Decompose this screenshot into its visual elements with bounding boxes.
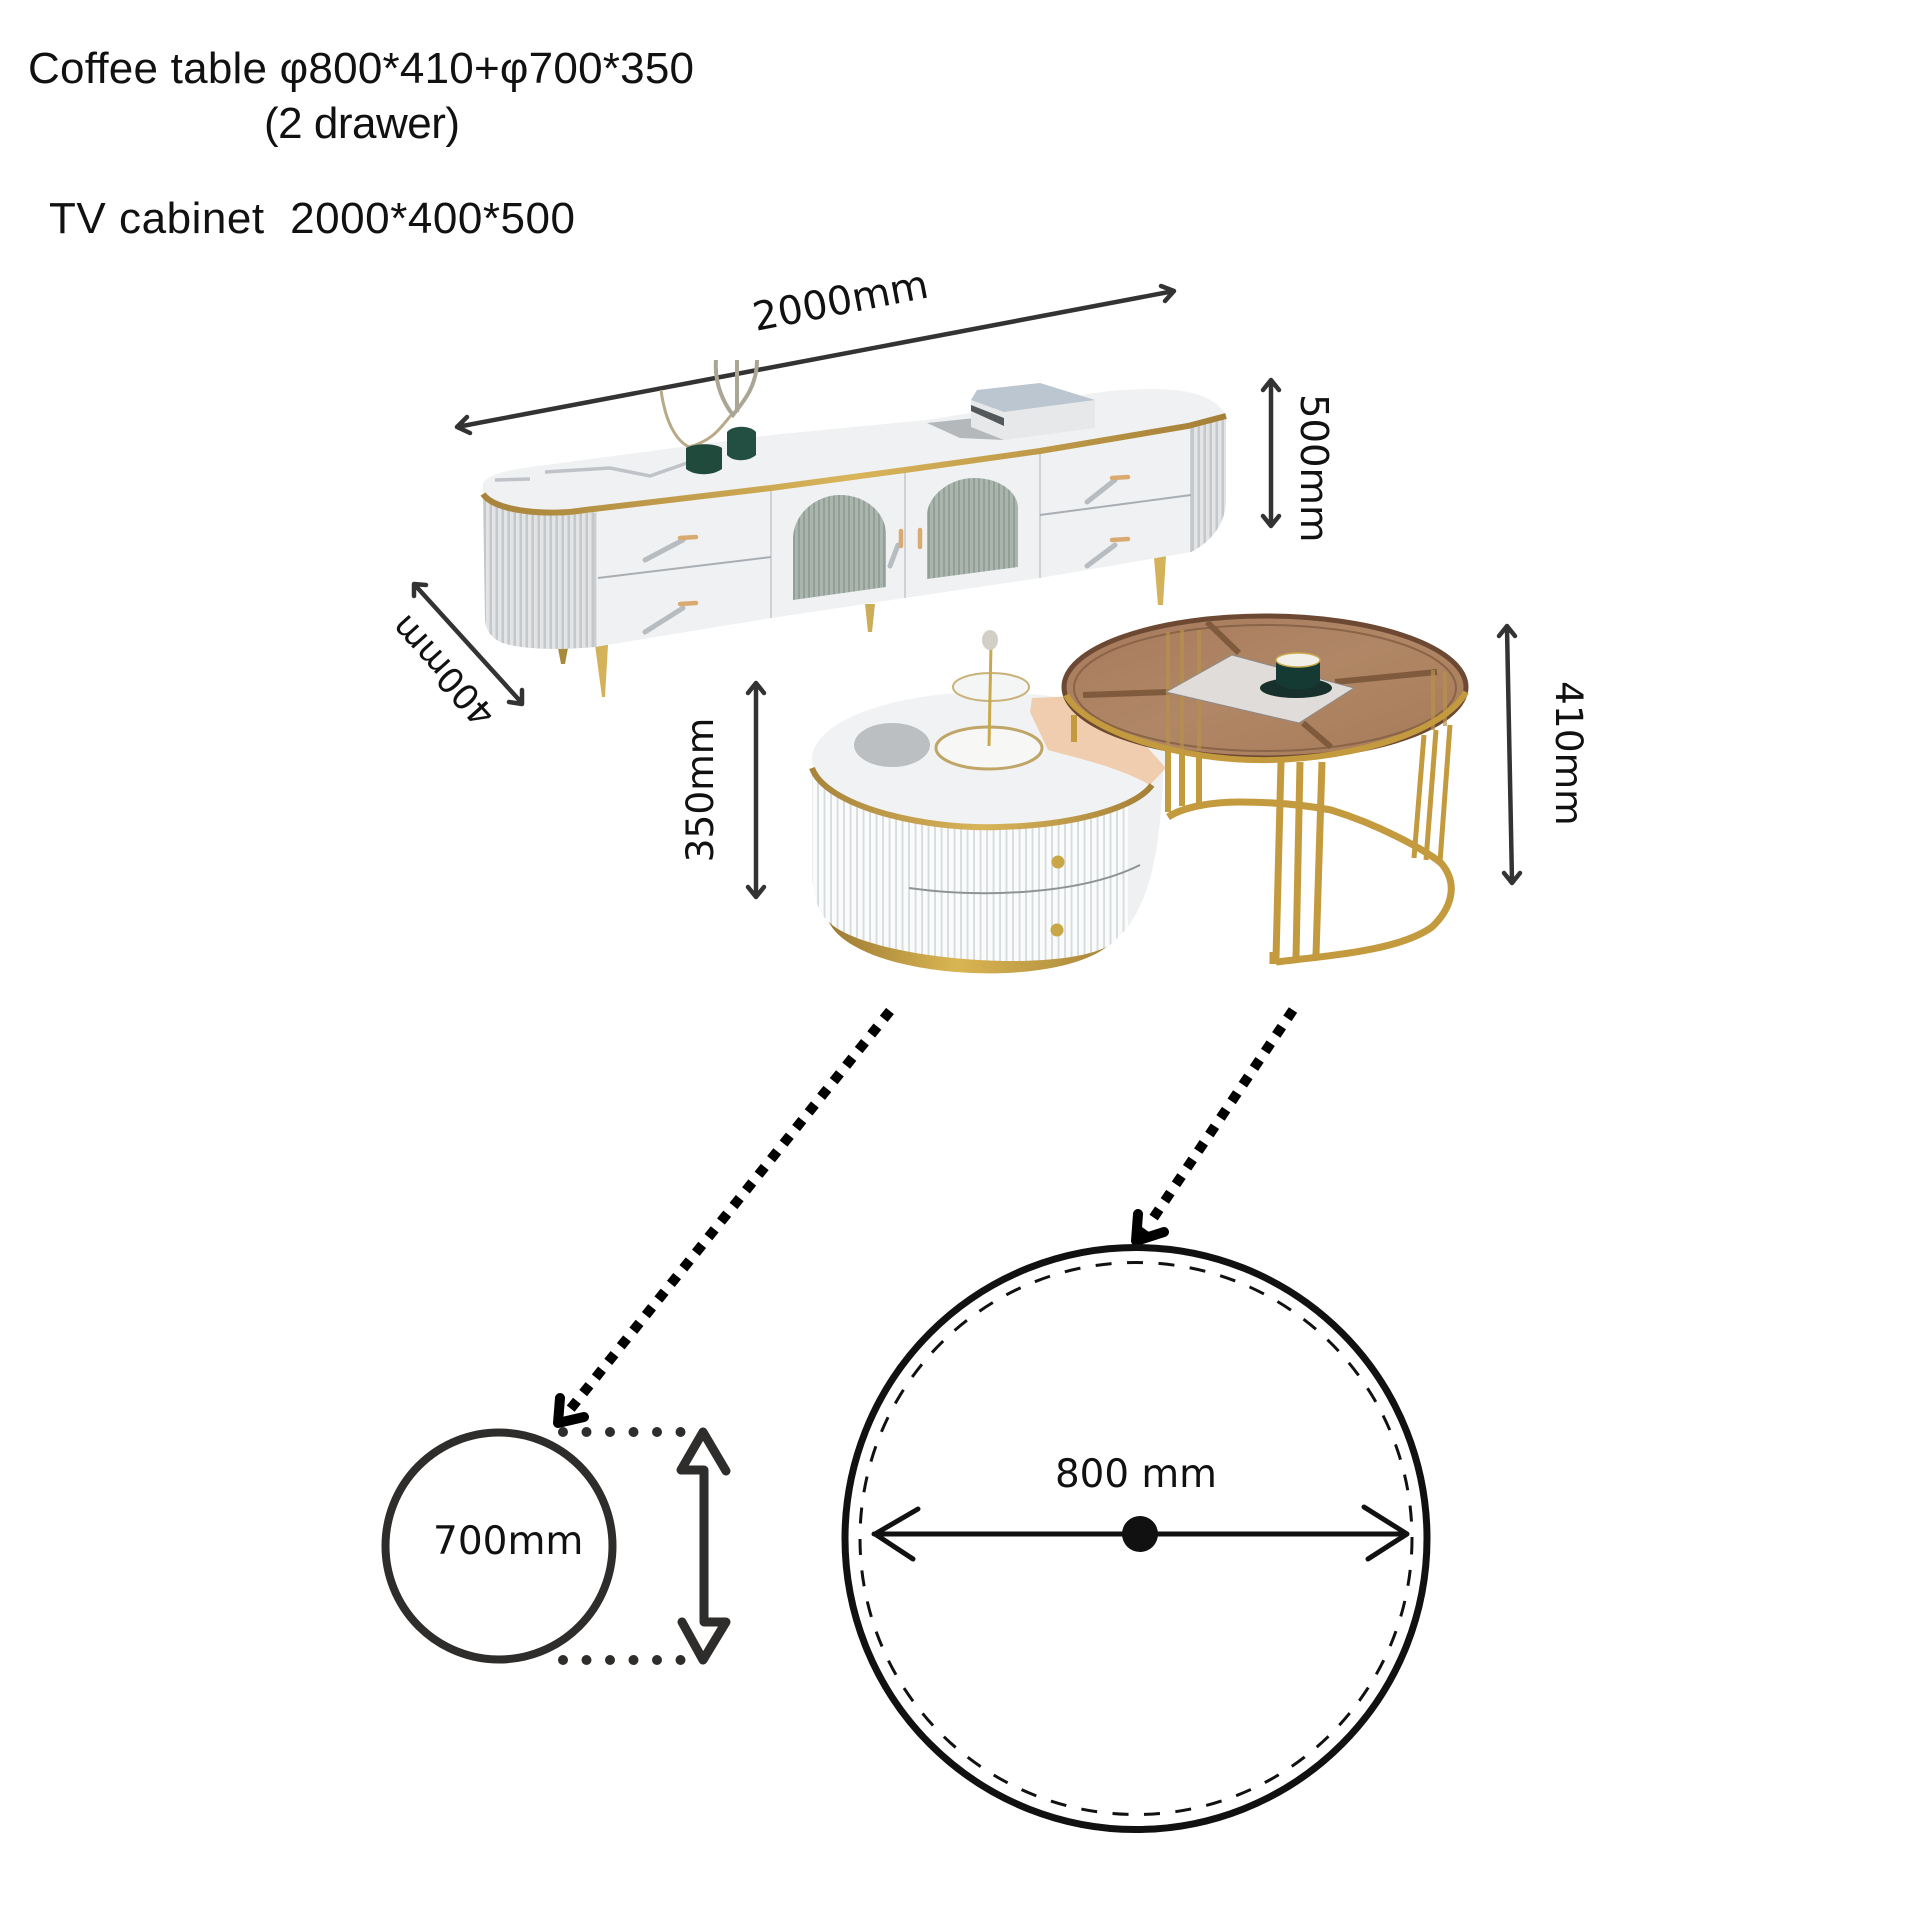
arrow: 350mm <box>748 683 764 897</box>
dotted guides <box>563 1432 682 1660</box>
dimension: cabinet height <box>1263 380 1336 542</box>
magazine <box>1166 655 1354 723</box>
dimension: cabinet depth <box>384 584 522 734</box>
dimension: cabinet width <box>457 262 1174 433</box>
label: 410mm: 410mm <box>1547 681 1591 826</box>
glass door: right <box>927 478 1018 579</box>
marble veins <box>495 462 690 480</box>
circle outline <box>845 1248 1427 1830</box>
label: 700mm: 700mm <box>433 1519 583 1564</box>
cabinet body <box>483 418 1226 649</box>
plate shadow <box>854 723 930 767</box>
dimension: drum height <box>678 683 764 897</box>
amber reflection <box>1030 695 1166 785</box>
center point <box>1122 1516 1158 1552</box>
dotted arrow: glass table to large circle <box>1136 1010 1293 1241</box>
label: 400mm: 400mm <box>384 607 504 734</box>
diagram: 800mm circle <box>845 1248 1427 1830</box>
label: 800 mm: 800 mm <box>1055 1452 1217 1497</box>
drawer knobs <box>1050 856 1064 936</box>
diameter arrow <box>874 1507 1407 1559</box>
label: 350mm: 350mm <box>678 718 722 862</box>
books <box>927 383 1095 440</box>
arrow: 2000mm <box>457 286 1174 433</box>
photo: glass top table <box>1064 616 1466 964</box>
gold frame <box>1074 715 1451 964</box>
text: tv cabinet size: TV cabinet 2000*400*500 <box>49 194 575 243</box>
marble table top <box>812 692 1166 826</box>
gold rim <box>483 416 1226 513</box>
marble top <box>483 389 1226 515</box>
fluted ends <box>480 410 1228 660</box>
handles and shadows <box>645 477 1128 632</box>
diagram: 700mm circle <box>386 1432 726 1660</box>
drawer seam <box>909 865 1140 893</box>
circle outline <box>386 1432 612 1660</box>
door and drawer seams <box>595 428 1191 647</box>
gold lower rim <box>1066 692 1466 760</box>
tiered plate stand <box>936 630 1042 769</box>
vase decor <box>661 360 757 474</box>
label: 500mm: 500mm <box>1291 394 1336 542</box>
dimension: glass table height <box>1499 626 1591 883</box>
text: coffee table size: Coffee table φ800*410+φ700*350 <box>28 44 694 93</box>
glass door: left <box>793 495 886 600</box>
cabinet legs <box>558 556 1166 697</box>
gold rim <box>812 768 1152 827</box>
glass top <box>1064 616 1466 758</box>
arrow: 400mm <box>414 584 522 704</box>
photo: TV cabinet <box>480 360 1228 697</box>
see-through frame under glass <box>1083 622 1445 750</box>
fluted drum body <box>812 772 1163 961</box>
arrow: 410mm <box>1499 626 1520 883</box>
gold base <box>827 918 1114 973</box>
photo: round drawer table <box>805 630 1170 980</box>
glass inner ring <box>1074 625 1456 751</box>
label: 2000mm: 2000mm <box>749 262 932 341</box>
arrow: 500mm <box>1263 380 1279 526</box>
inner dashed circle <box>860 1262 1412 1814</box>
cup and saucer <box>1260 653 1332 698</box>
text: drawer count: (2 drawer) <box>264 99 460 148</box>
double arrow <box>681 1432 726 1660</box>
dotted arrow: drum to small circle <box>558 1011 890 1423</box>
title: product sizes <box>28 44 694 243</box>
